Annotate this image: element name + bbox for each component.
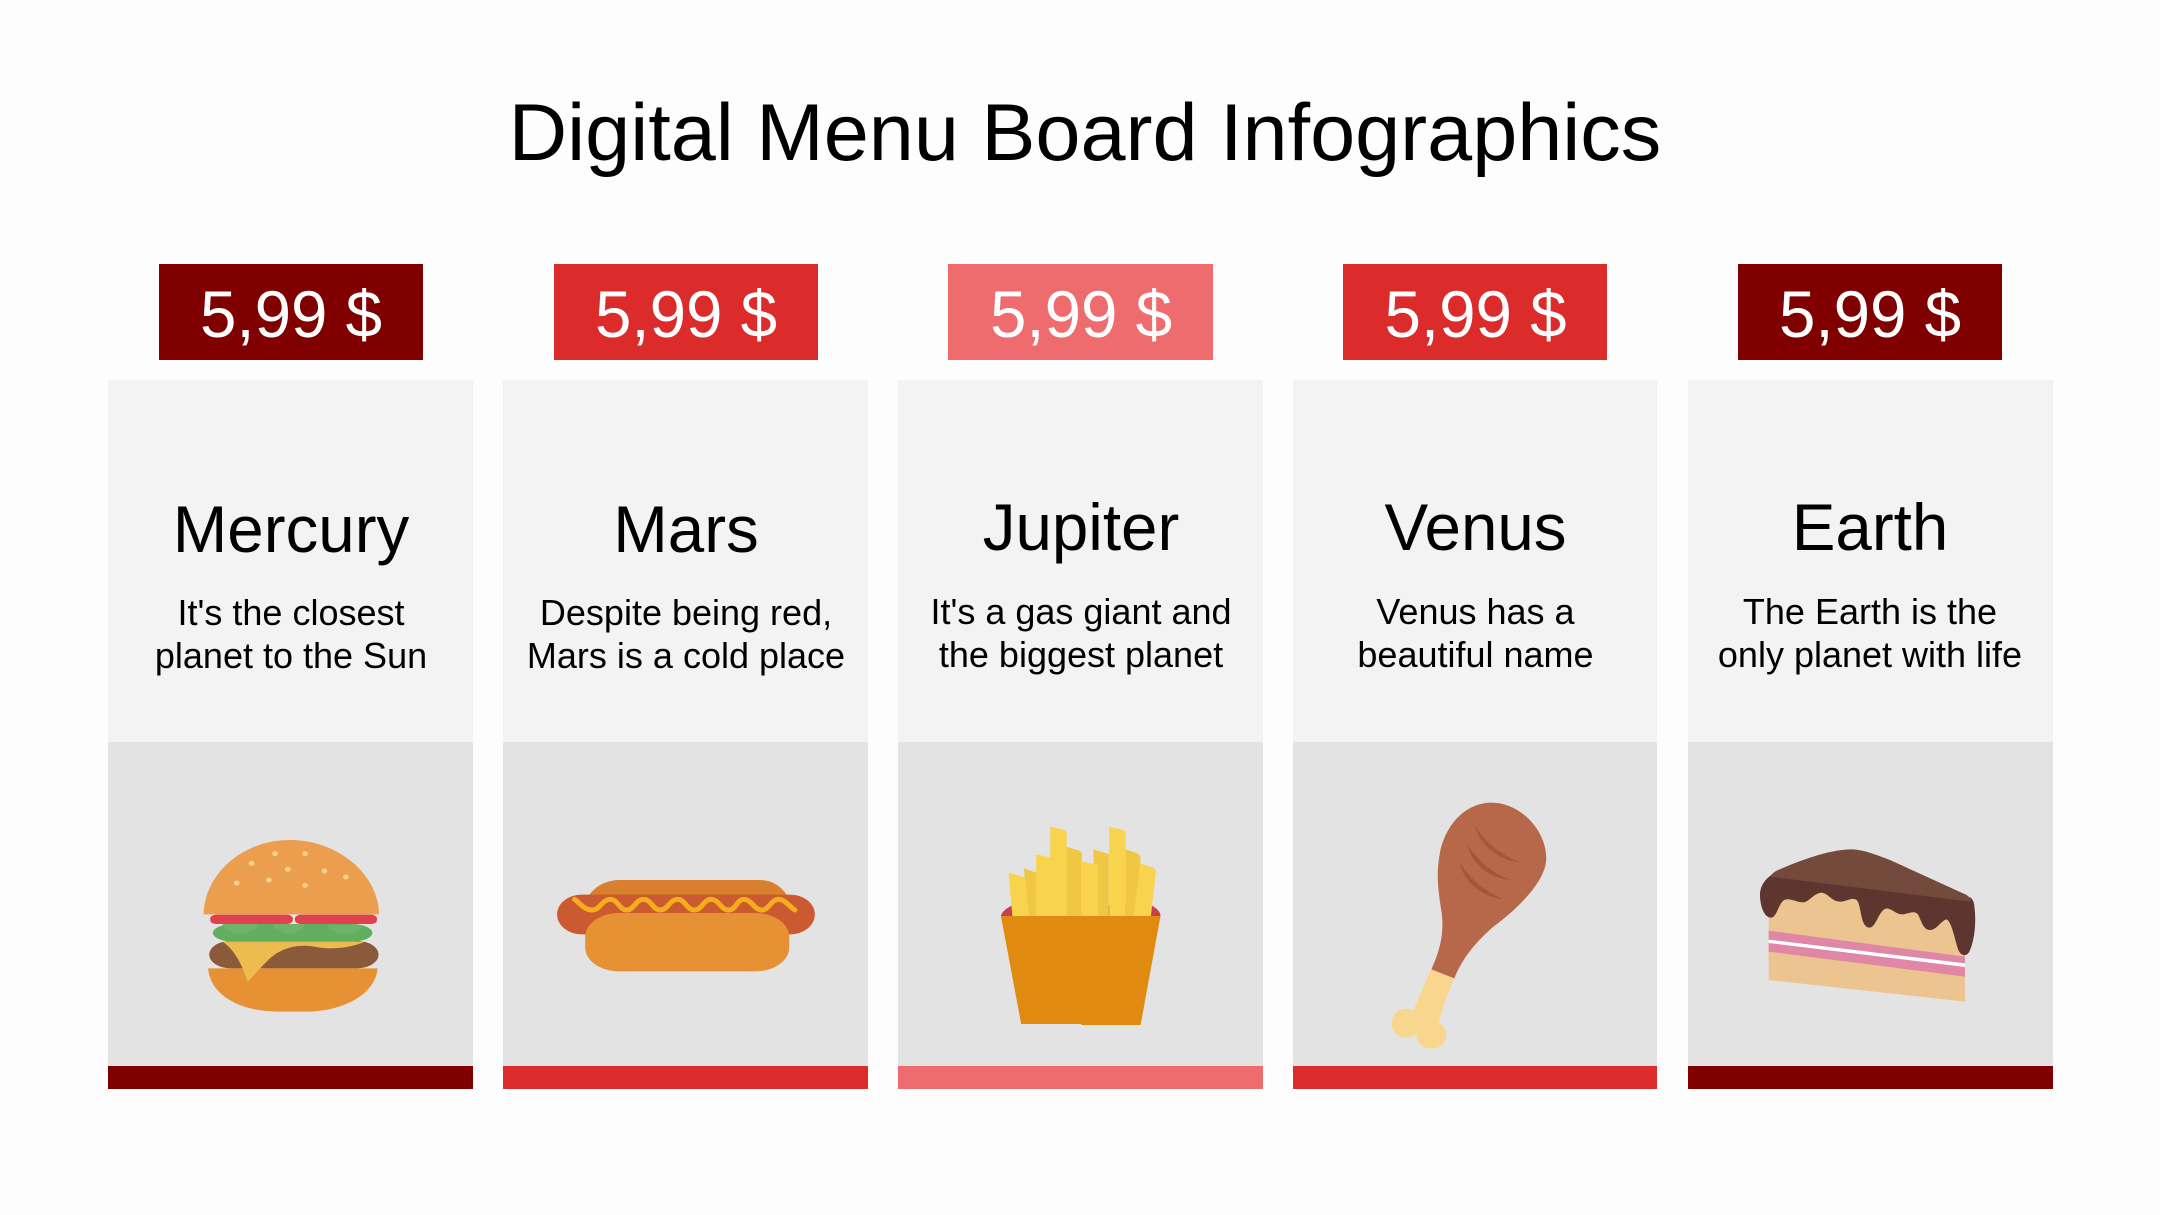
description: Mercury: It's the closest [178,592,404,633]
description: Venus: Venus has a [1376,591,1576,632]
text panel background: Earth [1688,380,2053,743]
price tag: Earth [1738,264,2002,360]
text panel background: Mercury [108,380,473,743]
icon: chicken leg [1392,803,1546,1049]
price tag: Venus [1343,264,1607,360]
accent bar: Jupiter [898,1066,1263,1089]
description: Mars: Mars is a cold place [527,635,845,676]
text panel background: Venus [1293,380,1657,743]
description: Venus: beautiful name [1357,634,1594,675]
panel: Jupiter [898,264,1263,1089]
accent bar: Mars [503,1066,868,1089]
panel: Venus [1293,264,1657,1089]
image panel background: Mars [503,742,868,1066]
description: Earth: The Earth is the [1743,591,1997,632]
price tag: Jupiter [948,264,1213,360]
price tag: Mars: 5,99 $ [595,278,777,351]
description: Mars: Despite being red, [540,592,832,633]
accent bar: Venus [1293,1066,1657,1089]
icon: hot dog [557,880,815,971]
panel: Mars [503,264,868,1089]
accent bar: Earth [1688,1066,2053,1089]
icon: burger [204,840,379,1012]
image panel background: Venus [1293,742,1657,1066]
text panel background: Mars [503,380,868,743]
description: Jupiter: It's a gas giant and [930,591,1232,632]
heading: Earth: Earth [1792,491,1948,564]
price tag: Earth: 5,99 $ [1779,278,1961,351]
price tag: Jupiter: 5,99 $ [990,278,1172,351]
description: Jupiter: the biggest planet [939,634,1223,675]
price tag: Mercury: 5,99 $ [200,278,382,351]
accent bar: Mercury [108,1066,473,1089]
text panel background: Jupiter [898,380,1263,743]
heading: Mars: Mars [613,493,759,566]
image panel background: Mercury [108,742,473,1066]
title: Digital Menu Board Infographics [509,88,1661,178]
price tag: Venus: 5,99 $ [1384,278,1567,351]
description: Mercury: planet to the Sun [155,635,427,676]
heading: Jupiter: Jupiter [983,491,1179,564]
image panel background: Earth [1688,742,2053,1066]
icon: cake slice [1760,849,1975,1002]
price tag: Mars [554,264,818,360]
description: Earth: only planet with life [1718,634,2022,675]
image panel background: Jupiter [898,742,1263,1066]
price tag: Mercury [159,264,423,360]
panel: Mercury [108,264,473,1089]
icon: french fries [1001,827,1160,1025]
heading: Venus: Venus [1384,491,1567,564]
panel: Earth [1688,264,2053,1089]
heading: Mercury: Mercury [173,493,410,566]
